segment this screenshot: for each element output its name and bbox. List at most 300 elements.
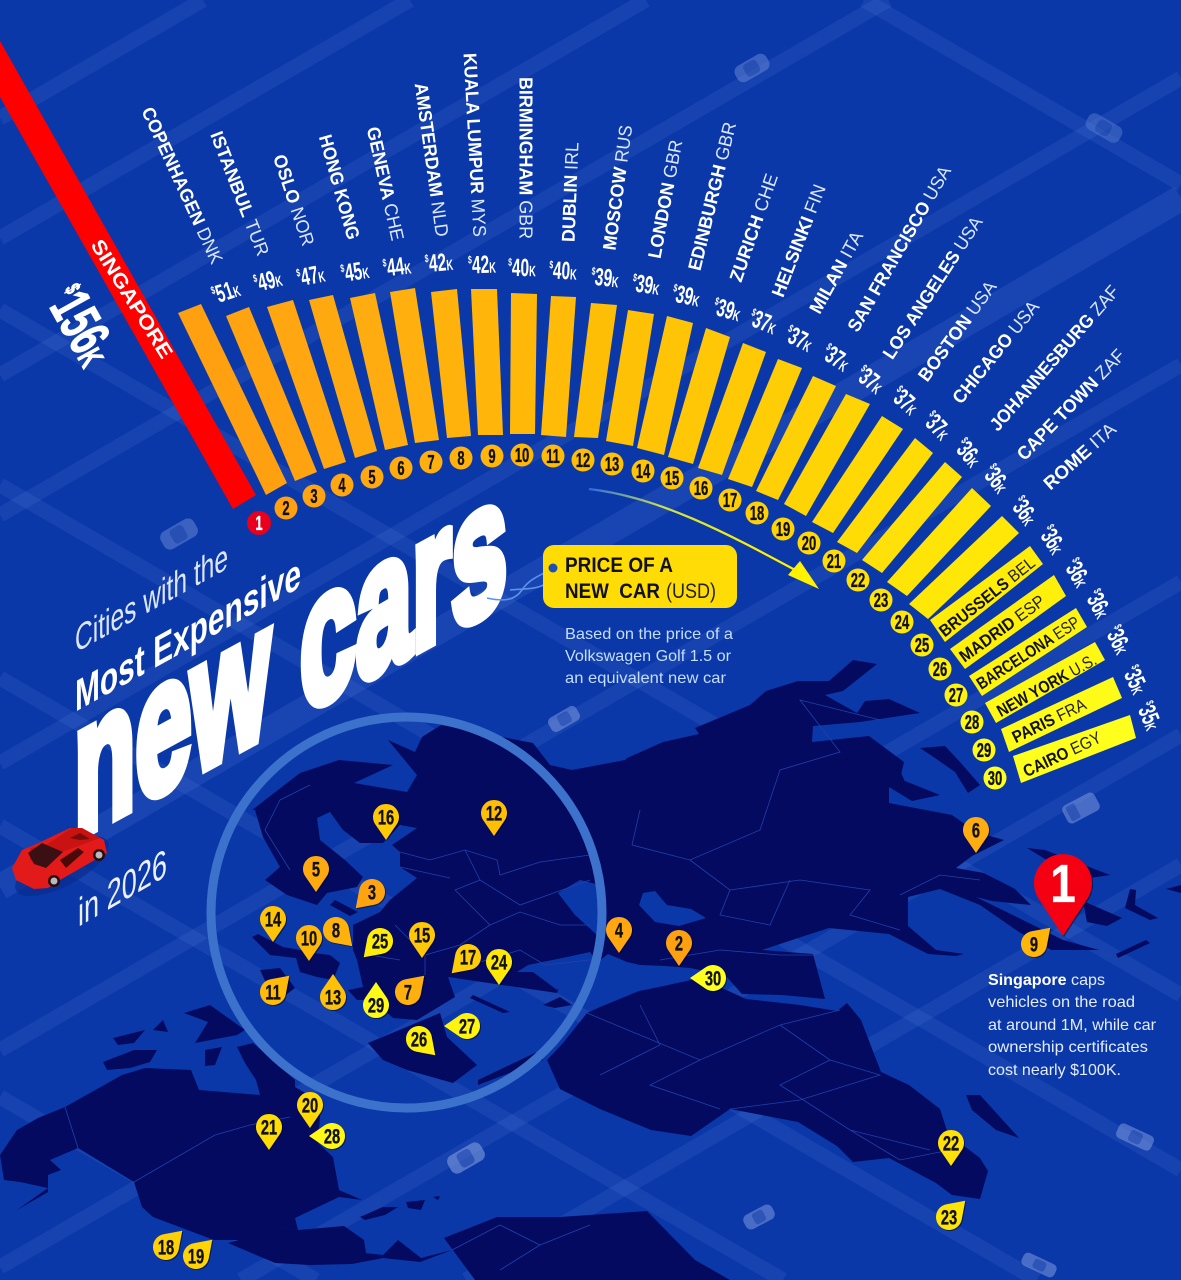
- value: Singapore 156K: $: [60, 280, 85, 298]
- value: 39K: K: [611, 274, 619, 291]
- badge 23: 23: [874, 589, 888, 612]
- title line: Cities with the: Cities with the: [75, 536, 228, 661]
- bar 18: [756, 376, 836, 500]
- text: methodology note: [565, 626, 733, 687]
- badge 16: [690, 476, 712, 500]
- pin 17: [443, 939, 486, 982]
- badge 9: 9: [488, 445, 496, 468]
- pin 6: [963, 817, 989, 853]
- value: 36K: K: [1091, 608, 1109, 622]
- value: 39K: 39: [634, 270, 655, 300]
- value: 40K: 40: [512, 254, 529, 282]
- icon: faint car: [1060, 791, 1102, 825]
- map: Asia Pacific islands: [882, 746, 1181, 958]
- badge 25: 25: [915, 634, 929, 657]
- pin 14: 14: [265, 908, 281, 931]
- map pins: [148, 800, 1092, 1274]
- value: 36K: $: [1070, 555, 1082, 564]
- title: [74, 430, 507, 936]
- bar 20: [812, 416, 903, 533]
- bar 28: [985, 642, 1105, 723]
- pin 2: 2: [675, 932, 683, 955]
- pin 26: [401, 1021, 444, 1064]
- bar 17: [728, 359, 802, 487]
- badge 17: [718, 488, 742, 512]
- badge 7: [420, 450, 442, 474]
- bar 22: [862, 462, 962, 573]
- badge 14: [632, 460, 654, 483]
- city: Chicago: CHICAGO USA: [948, 296, 1044, 408]
- value: 39K: K: [651, 281, 661, 299]
- pin 11: [255, 967, 298, 1010]
- value: 40K: $: [549, 259, 554, 271]
- pin 12: [481, 800, 507, 836]
- value: 42K: K: [446, 257, 454, 274]
- city: Boston: BOSTON USA: [913, 276, 1001, 385]
- bar 10: [510, 293, 537, 434]
- value: 39K: 39: [673, 281, 696, 311]
- bar 30: [1013, 715, 1136, 783]
- value: Singapore 156K: 156: [37, 281, 121, 363]
- value: 36K: K: [991, 482, 1009, 497]
- value: 49K: 49: [255, 266, 278, 297]
- pin 22: [938, 1130, 964, 1166]
- badge 19: 19: [776, 518, 790, 541]
- value: 37K: K: [934, 428, 950, 444]
- bar 15: [668, 328, 730, 464]
- badge 2: [274, 496, 298, 520]
- value: 36K: K: [1071, 577, 1088, 591]
- icon: faint car: [158, 516, 200, 552]
- badge 18: 18: [750, 502, 764, 525]
- badge 22: 22: [851, 569, 865, 592]
- bar 4: [267, 300, 346, 469]
- value: 36K: 36: [1007, 495, 1039, 525]
- bar 23: [887, 488, 991, 596]
- pin 9: 9: [1030, 933, 1038, 956]
- value: 40K: K: [570, 266, 577, 283]
- city: New York: NEW YORK U.S.: [994, 650, 1100, 721]
- badge 20: 20: [802, 532, 816, 555]
- city: San Francisco: SAN FRANCISCO USA: [843, 161, 955, 335]
- value: 36K: 36: [1101, 625, 1133, 653]
- pin 29: 29: [368, 994, 384, 1017]
- icon: faint car: [1020, 1251, 1058, 1279]
- pin 14: [260, 906, 286, 942]
- badge 27: [944, 684, 968, 707]
- badge 26: [928, 658, 952, 681]
- value: 42K: $: [424, 252, 429, 265]
- value: 39K: 39: [713, 294, 738, 325]
- badge 24: 24: [895, 611, 910, 634]
- value: 40K: K: [529, 263, 536, 280]
- badge 12: 12: [576, 449, 590, 472]
- city: Madrid: MADRID ESP: [956, 591, 1049, 666]
- badge 30: 30: [988, 767, 1002, 790]
- city: Johannesburg: JOHANNESBURG ZAF: [985, 281, 1123, 435]
- value: 42K: $: [468, 254, 472, 266]
- badge 1: [247, 511, 271, 535]
- pin 3: [347, 874, 390, 917]
- value: 36K: 36: [1035, 524, 1067, 553]
- icon: faint car: [1114, 1122, 1156, 1152]
- text: Singapore note: vehicles on the road: [988, 994, 1135, 1011]
- pin 27: 27: [459, 1015, 475, 1038]
- badge 2: 2: [282, 497, 290, 520]
- badge 15: 15: [665, 467, 679, 490]
- badge 21: 21: [827, 550, 841, 573]
- value: 37K: 37: [888, 384, 919, 416]
- value: 35K: K: [1141, 721, 1159, 733]
- value: 51K: $: [209, 284, 217, 297]
- value: 40K: $: [508, 256, 512, 268]
- badge 17: 17: [723, 489, 737, 512]
- bar: Singapore: [0, 41, 256, 509]
- badge 18: [746, 502, 768, 525]
- pin 5: [303, 856, 329, 892]
- value: 42K: 42: [428, 249, 447, 278]
- value: 45K: 45: [343, 257, 364, 287]
- city: Dublin: DUBLIN IRL: [557, 142, 582, 242]
- value: 36K: 36: [1060, 557, 1092, 586]
- value: 39K: $: [672, 282, 679, 294]
- value: 36K: 36: [1081, 589, 1113, 617]
- pin 20: 20: [302, 1094, 318, 1117]
- bar 14: [637, 316, 693, 455]
- badge 14: 14: [636, 460, 651, 483]
- icon: faint car: [445, 1140, 487, 1176]
- badge 8: [450, 446, 472, 470]
- city: Edinburgh: EDINBURGH GBR: [684, 120, 740, 272]
- value: 37K: $: [894, 383, 905, 395]
- bar 27: [969, 608, 1087, 696]
- pin 11: 11: [265, 981, 281, 1004]
- value: 37K: 37: [853, 363, 884, 395]
- badge 22: [846, 568, 870, 592]
- badge 26: 26: [933, 658, 947, 681]
- value: 51K: K: [231, 283, 243, 301]
- badge 30: [984, 766, 1006, 790]
- badge 28: 28: [965, 711, 979, 734]
- value: 40K: 40: [552, 257, 571, 285]
- pin 29: [363, 982, 389, 1018]
- value: 39K: K: [731, 307, 742, 325]
- pin 28: [309, 1123, 345, 1149]
- text: Singapore note: [988, 972, 1157, 1079]
- title word: cars: cars: [300, 430, 507, 755]
- badge 11: [542, 444, 564, 468]
- map: Africa: [547, 978, 988, 1199]
- value: 45K: K: [361, 265, 371, 282]
- value: 35K: K: [1127, 684, 1145, 697]
- value: 42K: 42: [471, 251, 490, 279]
- badge 24: [890, 610, 914, 634]
- value: 49K: $: [252, 272, 258, 285]
- pin 12: 12: [486, 802, 502, 825]
- value: 37K: K: [836, 358, 850, 375]
- value: 47K: K: [317, 268, 327, 286]
- badge 10: 10: [515, 444, 529, 467]
- badge 1: 1: [255, 512, 263, 535]
- icon: faint car: [1083, 111, 1125, 145]
- pin 4: 4: [615, 919, 623, 942]
- pin 27: [444, 1013, 480, 1039]
- badge 27: 27: [949, 684, 963, 707]
- bar 25: [930, 546, 1043, 642]
- value: 42K: K: [489, 259, 496, 276]
- value: 37K: 37: [820, 341, 849, 374]
- pin 20: [297, 1092, 323, 1128]
- bar 3: [226, 307, 317, 481]
- text: methodology note: Based on the price of a: [565, 626, 733, 643]
- badge 11: 11: [546, 445, 560, 468]
- badge 5: [360, 466, 384, 489]
- value: 37K: $: [750, 306, 758, 319]
- bar 26: [950, 575, 1066, 669]
- text: methodology note: an equivalent new car: [565, 670, 727, 687]
- value: 49K: K: [274, 273, 284, 291]
- pin 23: [931, 1192, 974, 1235]
- value: 35K: 35: [1118, 665, 1150, 692]
- pin 10: [296, 925, 322, 961]
- city: London: LONDON GBR: [644, 138, 686, 260]
- pin 25: [355, 923, 398, 966]
- value: 37K: K: [903, 402, 919, 419]
- city: Cape Town: CAPE TOWN ZAF: [1012, 345, 1129, 464]
- value: 35K: $: [1143, 699, 1156, 707]
- badge 10: [510, 444, 534, 467]
- map: North America: [0, 1043, 362, 1240]
- map: Caribbean islands: [360, 1196, 440, 1220]
- legend: price of a new car: (USD): [666, 580, 716, 603]
- badge 16: 16: [694, 477, 708, 500]
- pin 28: 28: [324, 1125, 340, 1148]
- pin 5: 5: [312, 858, 320, 881]
- circle: Europe inset ring: [211, 717, 602, 1108]
- pin 18: 18: [158, 1236, 174, 1259]
- value: 37K: 37: [748, 306, 775, 338]
- badge 28: [960, 710, 984, 734]
- text: Singapore note: cost nearly $100K.: [988, 1062, 1121, 1079]
- value: 36K: $: [987, 461, 999, 471]
- value: 37K: K: [800, 338, 814, 356]
- city: Barcelona: BARCELONA ESP: [973, 613, 1083, 693]
- bar 29: [1001, 677, 1122, 752]
- title line: Most Expensive: Most Expensive: [75, 548, 301, 722]
- city: Moscow: MOSCOW RUS: [599, 124, 636, 251]
- pin 21: [256, 1114, 282, 1150]
- badge 3: 3: [310, 485, 318, 508]
- city: Hong Kong: HONG KONG: [315, 132, 364, 242]
- pin 13: 13: [325, 986, 341, 1009]
- value: 44K: $: [382, 257, 387, 269]
- icon: faint car: [546, 704, 582, 734]
- pin 4: [606, 917, 632, 953]
- bar 16: [698, 343, 766, 475]
- pin 21: 21: [261, 1116, 277, 1139]
- value: 51K: 51: [212, 277, 237, 308]
- value: 39K: K: [691, 292, 701, 310]
- badge 23: [870, 588, 892, 612]
- badge 13: [600, 452, 624, 476]
- text: Singapore note: ownership certificates: [988, 1039, 1148, 1056]
- pin 23: 23: [941, 1206, 957, 1229]
- value: 36K: 36: [951, 437, 983, 467]
- bar 24: [909, 516, 1019, 619]
- badge 13: 13: [605, 453, 619, 476]
- map: South America: [444, 1211, 730, 1280]
- badge 8: 8: [457, 447, 465, 470]
- map: country borders: [65, 700, 980, 1270]
- value: 44K: 44: [385, 253, 406, 282]
- city labels: [137, 52, 1129, 781]
- pin 19: 19: [188, 1245, 204, 1268]
- value: 37K: K: [868, 380, 884, 398]
- city: Amsterdam: AMSTERDAM NLD: [411, 82, 453, 238]
- value: Singapore 156K: K: [70, 342, 110, 373]
- badge 29: [972, 738, 996, 762]
- map: Madagascar: [966, 1095, 1019, 1138]
- pin 24: [486, 949, 512, 985]
- pin 1: Singapore: [1034, 854, 1092, 936]
- value: 36K: K: [964, 455, 981, 471]
- bar 8: [431, 289, 471, 438]
- value: 45K: $: [339, 262, 345, 275]
- city: Cairo: CAIRO EGY: [1020, 728, 1104, 781]
- badge 7: 7: [427, 451, 435, 474]
- value: 36K: $: [1016, 493, 1028, 503]
- value: 47K: 47: [299, 261, 321, 292]
- icon: faint car: [741, 1202, 777, 1232]
- value: 37K: $: [859, 362, 869, 374]
- city: Copenhagen: COPENHAGEN DNK: [137, 104, 228, 268]
- pin 7: 7: [404, 981, 412, 1004]
- badge 12: [572, 448, 594, 472]
- text: Singapore note: Singapore caps: [988, 972, 1105, 989]
- badge 4: [330, 474, 354, 497]
- text: Singapore note: at around 1M, while car: [988, 1017, 1157, 1034]
- world map: [0, 660, 1181, 1280]
- value: 36K: $: [1044, 522, 1057, 532]
- value: 39K: $: [632, 271, 638, 284]
- value: 36K: K: [1111, 644, 1129, 658]
- city: Zurich: ZURICH CHE: [725, 171, 782, 284]
- badge 29: 29: [977, 739, 991, 762]
- badge 6: [390, 456, 412, 480]
- pin 16: 16: [378, 806, 394, 829]
- pin 25: 25: [372, 930, 388, 953]
- badge 20: [798, 532, 820, 555]
- pin 30: 30: [705, 967, 721, 990]
- map: Arctic islands: [103, 1005, 245, 1070]
- bar 5: [309, 295, 377, 458]
- value: 37K: $: [927, 408, 938, 419]
- text: methodology note: Volkswagen Golf 1.5 or: [565, 648, 732, 665]
- label: Singapore: SINGAPORE: [86, 236, 177, 363]
- bar 21: [837, 438, 933, 553]
- bar chart: car prices radial bars: [0, 41, 1136, 783]
- pin 10: 10: [301, 927, 317, 950]
- pin 9: [1016, 919, 1059, 962]
- value: 35K: $: [1129, 663, 1142, 671]
- city: Geneva: GENEVA CHE: [363, 125, 408, 243]
- city: Oslo: OSLO NOR: [269, 152, 319, 248]
- value: 44K: K: [403, 260, 412, 278]
- bar 2: [178, 304, 287, 495]
- map: seas and islands of Europe: [252, 880, 706, 1085]
- pin 3: 3: [368, 881, 376, 904]
- value: 37K: K: [765, 320, 778, 338]
- value: 37K: 37: [784, 322, 812, 355]
- city: Kuala Lumpur: KUALA LUMPUR MYS: [460, 52, 490, 237]
- city: Brussels: BRUSSELS BEL: [935, 553, 1039, 641]
- badge 19: [772, 518, 794, 541]
- pin 18: [148, 1222, 191, 1265]
- legend: string tag: [487, 568, 554, 600]
- pin 17: 17: [460, 946, 476, 969]
- pin 22: 22: [943, 1132, 959, 1155]
- city: Birmingham: BIRMINGHAM GBR: [516, 77, 537, 239]
- badge 25: [910, 634, 934, 657]
- value: 36K: $: [959, 435, 970, 446]
- badge 4: 4: [338, 474, 346, 497]
- rank badges: [247, 444, 1006, 790]
- badge 5: 5: [368, 466, 376, 489]
- value: 47K: $: [295, 267, 301, 279]
- bar 13: [606, 310, 654, 446]
- map: Eurasia: [252, 660, 1099, 1020]
- badge 6: 6: [397, 457, 405, 480]
- title word: new: new: [74, 561, 270, 880]
- value labels: [209, 248, 1167, 734]
- city: Paris: PARIS FRA: [1009, 695, 1090, 747]
- badge 9: [480, 444, 504, 468]
- pin 13: [320, 974, 346, 1010]
- value: 35K: 35: [1132, 702, 1164, 728]
- pin 26: 26: [411, 1028, 427, 1051]
- city: Istanbul: ISTANBUL TUR: [206, 128, 274, 259]
- pin 7: [390, 967, 433, 1010]
- pin 1: Singapore: 1: [1050, 854, 1076, 914]
- legend: price of a new car: PRICE OF A: [565, 554, 673, 577]
- pin 2: [666, 930, 692, 966]
- badge 21: [822, 550, 846, 573]
- badge 3: [302, 484, 326, 508]
- value: 36K: 36: [979, 463, 1011, 493]
- bar 11: [541, 296, 576, 437]
- badge 15: [660, 466, 684, 490]
- pin 24: 24: [491, 951, 507, 974]
- city: Helsinki: HELSINKI FIN: [767, 181, 830, 300]
- pin 15: 15: [414, 924, 430, 947]
- value: 36K: $: [1091, 586, 1104, 595]
- arrow: reading direction: [589, 489, 819, 589]
- city: Rome: ROME ITA: [1039, 418, 1121, 494]
- pin 15: [409, 922, 435, 958]
- value: 39K: $: [714, 295, 721, 308]
- pin 6: 6: [972, 819, 980, 842]
- city: Milan: MILAN ITA: [805, 227, 868, 317]
- value: 37K: 37: [920, 409, 952, 441]
- pin 30: [690, 965, 726, 991]
- pin 8: 8: [332, 919, 340, 942]
- bar 7: [390, 288, 439, 443]
- value: 37K: $: [786, 322, 795, 335]
- map: Central America: [228, 1226, 452, 1265]
- legend: price of a new car: NEW CAR: [565, 580, 660, 603]
- bar 12: [574, 303, 617, 438]
- pin 8: [318, 912, 361, 955]
